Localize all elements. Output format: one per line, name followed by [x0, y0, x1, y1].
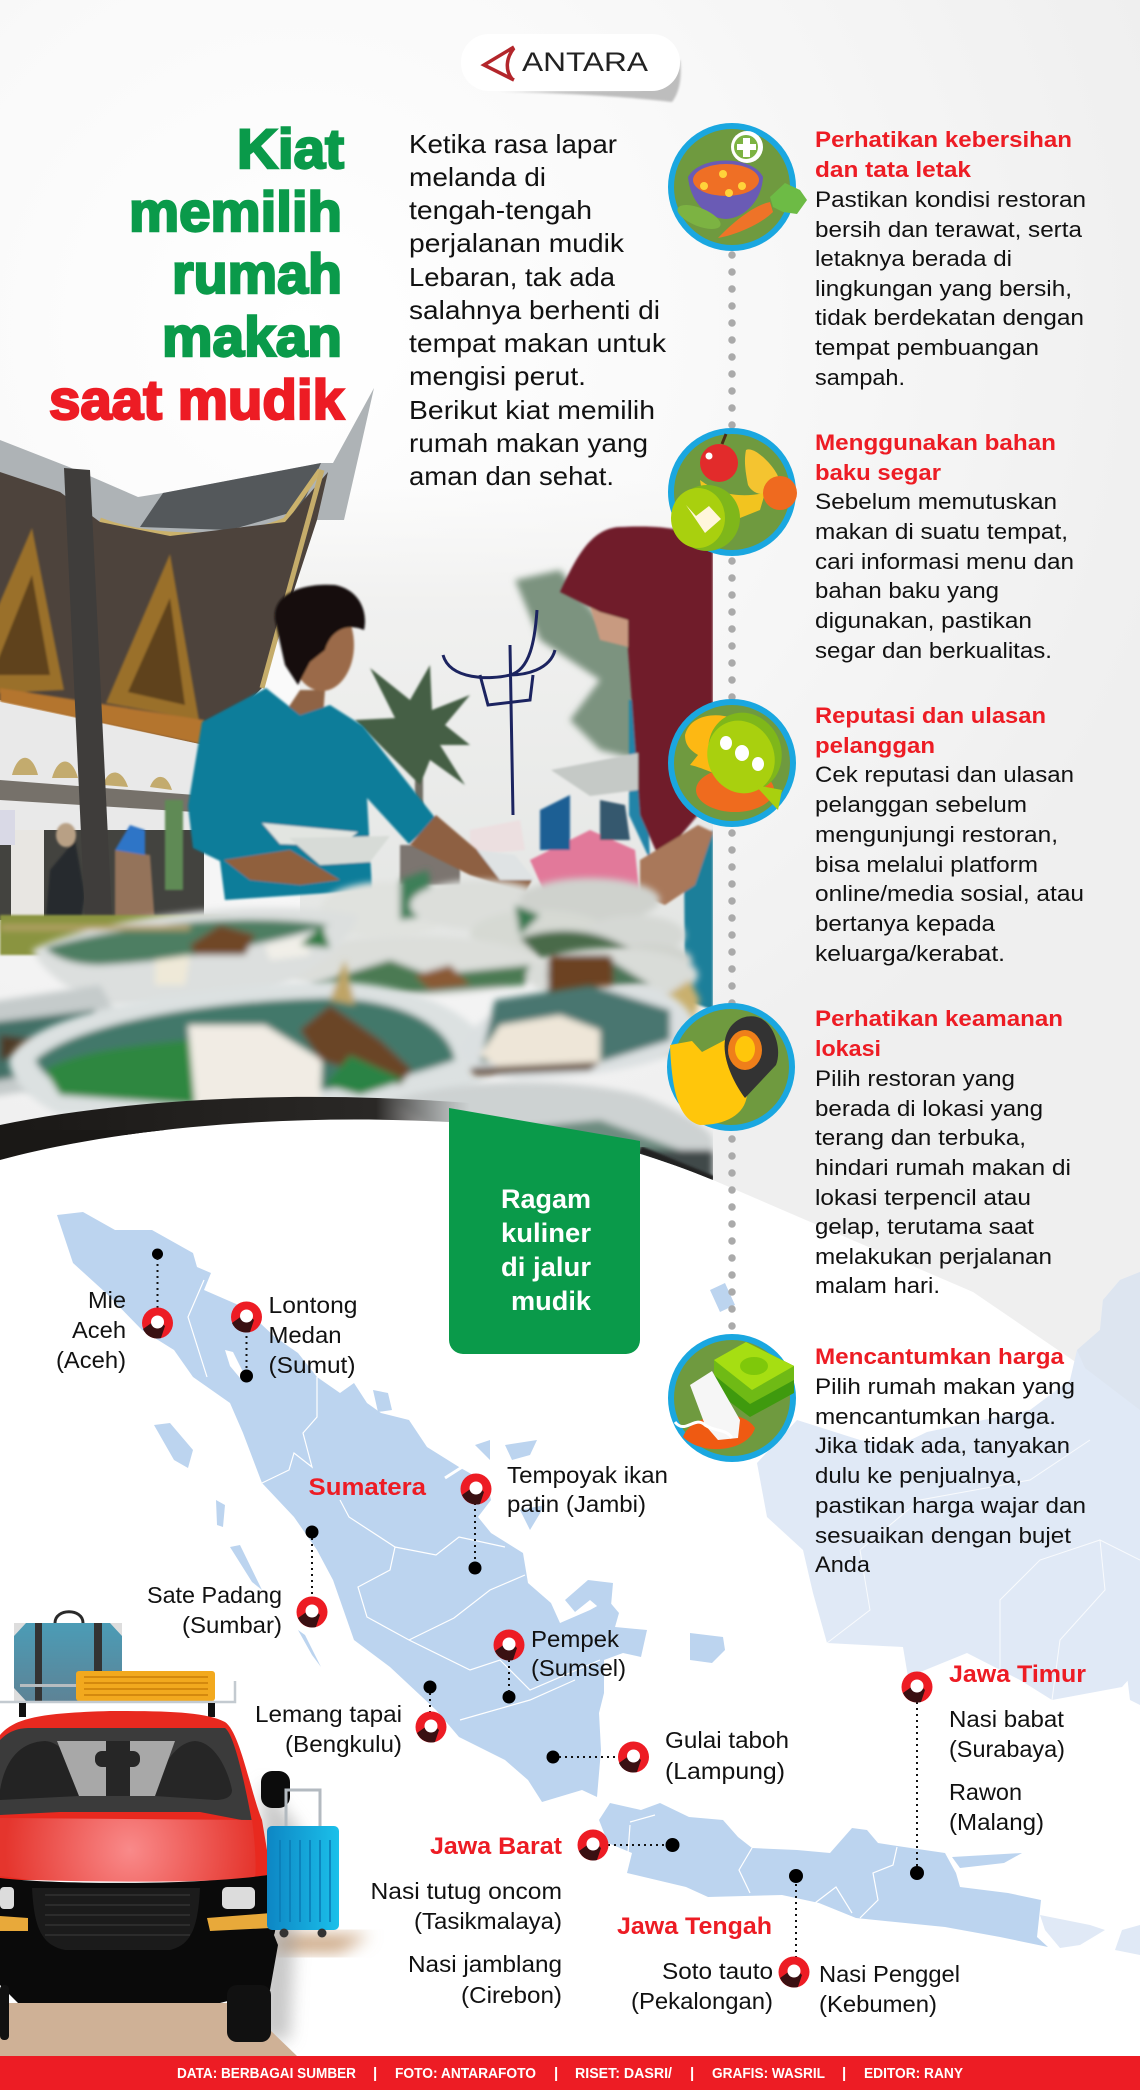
text: Mencantumkan harga: dulu ke penjualnya,	[815, 1463, 1022, 1488]
map: Sulawesi and eastern islands	[1040, 1640, 1140, 1955]
label: Jawa Tengah: (Pekalongan)	[631, 1988, 773, 2014]
marker: Gulai taboh: (Lampung)	[665, 1758, 785, 1784]
label: Jawa Tengah: Jawa Tengah	[617, 1913, 772, 1940]
text: Perhatikan keamanan lokasi: Perhatikan keamanan	[815, 1006, 1063, 1031]
text: Perhatikan kebersihan: Perhatikan kebersihan	[815, 127, 1072, 152]
text: Perhatikan kebersihan: tempat pembuangan	[815, 335, 1039, 360]
photo: woman with red hijab	[551, 526, 713, 1010]
van: red body	[0, 1711, 272, 1880]
text: Perhatikan kebersihan: sampah.	[815, 365, 905, 390]
van: wheels	[0, 1985, 271, 2042]
intro text: melanda di	[409, 162, 546, 192]
timeline dots	[728, 255, 736, 1340]
marker: Sate Padang: (Sumbar)	[182, 1612, 282, 1638]
van: hood	[0, 1818, 256, 1882]
photo: lamp post	[443, 610, 555, 815]
intro text	[409, 129, 667, 491]
text: Reputasi dan ulasan pelanggan: online/media sosial, atau	[815, 881, 1084, 906]
footer credits bar: |	[842, 2065, 846, 2082]
map: Sumatra offshore islands	[154, 1283, 735, 1667]
text: Perhatikan keamanan lokasi: melakukan perjalanan	[815, 1244, 1052, 1269]
label: Jawa Tengah: Nasi Penggel	[819, 1961, 960, 1987]
label: Jawa Barat: (Tasikmalaya)	[414, 1908, 562, 1934]
text: Perhatikan kebersihan: lingkungan yang bersih,	[815, 276, 1072, 301]
van: windshield	[0, 1728, 252, 1822]
photo: middle bowls	[283, 936, 700, 1055]
photo: bottom right bowl	[395, 1082, 713, 1190]
text: Reputasi dan ulasan pelanggan: bertanya kepada	[815, 911, 996, 936]
intro text: mengisi perut.	[409, 361, 586, 391]
icon: money and price tag	[671, 1337, 794, 1459]
text: Reputasi dan ulasan pelanggan: Reputasi dan ulasan	[815, 703, 1046, 728]
logo: ANTARA	[461, 34, 681, 102]
text: Menggunakan bahan baku segar: Menggunakan bahan	[815, 430, 1056, 455]
photo: background bags and tables	[398, 794, 640, 888]
van: ground and shadow	[0, 1780, 370, 2056]
text: Mencantumkan harga	[815, 1344, 1086, 1577]
intro text: Ketika rasa lapar	[409, 129, 617, 159]
footer credits bar: RISET: DASRI/	[575, 2065, 673, 2082]
intro text: Lebaran, tak ada	[409, 262, 616, 292]
photo: bowl left middle	[0, 908, 358, 1005]
footer credits bar: |	[554, 2065, 558, 2082]
text: Perhatikan keamanan lokasi	[815, 1006, 1071, 1298]
photo: dark bottom edge	[0, 1097, 470, 1135]
marker: Tempoyak ikan patin: patin (Jambi)	[507, 1491, 646, 1517]
green tab: Ragam kuliner: mudik	[511, 1286, 592, 1316]
marker: Jawa Timur	[902, 1672, 932, 1880]
text: Perhatikan kebersihan: letaknya berada di	[815, 246, 1012, 271]
title: rumah	[172, 242, 342, 305]
text: Perhatikan keamanan lokasi: lokasi	[815, 1036, 881, 1061]
marker: Tempoyak ikan patin	[460, 1462, 668, 1574]
photo: background people	[45, 800, 183, 925]
photo: food stall in front of Minangkabau building	[0, 388, 713, 1190]
text: Perhatikan kebersihan: bersih dan terawat, serta	[815, 217, 1083, 242]
logo: ANTARA: ANTARA	[522, 47, 648, 77]
marker: Mie Aceh: Mie	[88, 1287, 126, 1313]
label: Jawa Timur: Jawa Timur	[949, 1661, 1086, 1688]
photo: man with teal shirt	[188, 585, 535, 900]
title: memilih	[129, 180, 342, 243]
text: Mencantumkan harga: pastikan harga wajar dan	[815, 1493, 1086, 1518]
label: Jawa Barat: Nasi tutug oncom	[370, 1878, 562, 1904]
map: Belitung	[690, 1633, 725, 1663]
text: Mencantumkan harga: Anda	[815, 1552, 870, 1577]
map: Sumatra	[57, 1212, 647, 1802]
footer credits bar	[0, 2056, 1140, 2090]
photo: roof grey metal	[0, 388, 374, 540]
marker: Lemang tapai: (Bengkulu)	[285, 1731, 402, 1757]
text: Menggunakan bahan baku segar	[815, 430, 1074, 663]
text: Perhatikan keamanan lokasi: hindari rumah makan di	[815, 1155, 1071, 1180]
text: Perhatikan keamanan lokasi: berada di lokasi yang	[815, 1096, 1043, 1121]
van: roof suitcase	[14, 1612, 122, 1701]
marker: Pempek	[494, 1626, 626, 1704]
marker: Mie Aceh: (Aceh)	[56, 1347, 126, 1373]
text: Perhatikan keamanan lokasi: Pilih restoran yang	[815, 1066, 1015, 1091]
text: Perhatikan kebersihan	[815, 127, 1086, 390]
green tab: Ragam kuliner: kuliner	[501, 1218, 591, 1248]
photo: tree	[515, 570, 640, 760]
van: yellow box and rack	[0, 1671, 235, 1717]
marker: Sate Padang: Sate Padang	[147, 1582, 282, 1608]
photo: grass and hedge	[0, 915, 230, 955]
green tab: Ragam kuliner: Ragam	[501, 1184, 591, 1214]
marker: Pempek: Pempek	[531, 1626, 620, 1652]
text: Mencantumkan harga: Mencantumkan harga	[815, 1344, 1065, 1369]
marker: Tempoyak ikan patin: Tempoyak ikan	[507, 1462, 668, 1488]
label: Jawa Timur: (Surabaya)	[949, 1736, 1065, 1762]
footer credits bar: GRAFIS: WASRIL	[712, 2065, 825, 2082]
label: Sumatera: Sumatera	[308, 1474, 427, 1501]
marker: Lontong Medan	[231, 1292, 358, 1382]
footer credits bar: DATA: BERBAGAI SUMBER	[177, 2065, 356, 2082]
footer credits bar: |	[373, 2065, 377, 2082]
van with luggage	[0, 1612, 370, 2056]
label: Jawa Tengah: Soto tauto	[662, 1958, 773, 1984]
photo sky	[300, 570, 713, 949]
marker: Pempek: (Sumsel)	[531, 1655, 626, 1681]
photo: left edge bowl	[0, 984, 113, 1098]
footer credits bar: FOTO: ANTARAFOTO	[395, 2065, 536, 2082]
text: Reputasi dan ulasan pelanggan: pelanggan sebelum	[815, 792, 1027, 817]
photo: gable	[0, 472, 328, 745]
label: Jawa Tengah: (Kebumen)	[819, 1991, 937, 2017]
map of Indonesia	[57, 1212, 1140, 1955]
footer credits bar: EDITOR: RANY	[864, 2065, 963, 2082]
text: Perhatikan kebersihan: Pastikan kondisi restoran	[815, 187, 1086, 212]
green tab: Ragam kuliner	[449, 1108, 640, 1354]
blue luggage	[267, 1790, 339, 1938]
photo: gold triangles	[0, 528, 204, 745]
text: Reputasi dan ulasan pelanggan: pelanggan	[815, 733, 935, 758]
icon: chat bubbles	[671, 701, 795, 824]
label: Jawa Barat	[370, 1833, 562, 2008]
white lower map area	[0, 1120, 1140, 2090]
text: Menggunakan bahan baku segar: Sebelum memutuskan	[815, 489, 1057, 514]
photo: big front bowl	[9, 960, 496, 1115]
intro text: Berikut kiat memilih	[409, 395, 655, 425]
marker: Lemang tapai: Lemang tapai	[255, 1701, 402, 1727]
map: Java and Madura	[599, 1803, 1048, 1947]
title	[49, 117, 345, 431]
text: Perhatikan kebersihan: tidak berdekatan dengan	[815, 305, 1084, 330]
photo: palm tree	[355, 665, 470, 810]
van: front black bumper and grille	[0, 1875, 278, 2003]
marker: Gulai taboh	[546, 1727, 789, 1784]
text: Menggunakan bahan baku segar: bahan baku yang	[815, 578, 999, 603]
text: Reputasi dan ulasan pelanggan	[815, 703, 1084, 966]
photo: pole	[64, 468, 108, 900]
text: Perhatikan keamanan lokasi: lokasi terpencil atau	[815, 1185, 1031, 1210]
label: Jawa Tengah	[617, 1913, 960, 2017]
text: Reputasi dan ulasan pelanggan: keluarga/kerabat.	[815, 941, 1005, 966]
footer credits bar: |	[690, 2065, 694, 2082]
photo: back row of bowls	[320, 870, 692, 976]
marker: Jawa Tengah	[778, 1869, 810, 1988]
marker: Mie Aceh: Aceh	[72, 1317, 126, 1343]
text: Menggunakan bahan baku segar: segar dan berkualitas.	[815, 638, 1052, 663]
label: Jawa Timur: (Malang)	[949, 1809, 1044, 1835]
intro text: salahnya berhenti di	[409, 295, 660, 325]
text: Menggunakan bahan baku segar: baku segar	[815, 460, 941, 485]
marker: Lontong Medan: Medan	[268, 1322, 342, 1348]
label: Jawa Barat: (Cirebon)	[461, 1982, 562, 2008]
label: Jawa Timur: Rawon	[949, 1779, 1022, 1805]
text: Perhatikan kebersihan: dan tata letak	[815, 157, 972, 182]
marker: Mie Aceh	[56, 1248, 173, 1373]
text: Mencantumkan harga: Jika tidak ada, tanyakan	[815, 1433, 1070, 1458]
marker: Lemang tapai	[255, 1680, 446, 1757]
text: Menggunakan bahan baku segar: makan di suatu tempat,	[815, 519, 1068, 544]
map: Kalimantan	[757, 1272, 1140, 1700]
intro text: rumah makan yang	[409, 428, 648, 458]
text: Perhatikan keamanan lokasi: gelap, terutama saat	[815, 1214, 1035, 1239]
marker: Lontong Medan: Lontong	[268, 1292, 358, 1318]
title: saat mudik	[49, 368, 345, 431]
text: Menggunakan bahan baku segar: cari informasi menu dan	[815, 549, 1074, 574]
marker: Gulai taboh: Gulai taboh	[665, 1727, 789, 1753]
green tab: Ragam kuliner: di jalur	[501, 1252, 591, 1282]
intro text: tengah-tengah	[409, 195, 592, 225]
text: Mencantumkan harga: sesuaikan dengan bujet	[815, 1523, 1072, 1548]
marker: Jawa Barat	[578, 1830, 680, 1860]
label: Jawa Barat: Jawa Barat	[430, 1833, 562, 1860]
icon: location pin	[670, 1006, 792, 1128]
marker: Lontong Medan: (Sumut)	[268, 1352, 356, 1378]
photo: white building	[0, 702, 200, 830]
label: Jawa Timur	[949, 1661, 1086, 1835]
title: Kiat	[237, 117, 344, 180]
intro text: aman dan sehat.	[409, 461, 614, 491]
photo: right front bowl	[459, 985, 698, 1080]
van: side mirror	[261, 1771, 290, 1808]
text: Reputasi dan ulasan pelanggan: bisa melalui platform	[815, 852, 1038, 877]
intro text: tempat makan untuk	[409, 328, 667, 358]
text: Perhatikan keamanan lokasi: terang dan terbuka,	[815, 1125, 1026, 1150]
text: Perhatikan keamanan lokasi: malam hari.	[815, 1273, 940, 1298]
text: Reputasi dan ulasan pelanggan: mengunjungi restoran,	[815, 822, 1058, 847]
label: Jawa Barat: Nasi jamblang	[408, 1951, 562, 1977]
intro text: perjalanan mudik	[409, 228, 625, 258]
text: Menggunakan bahan baku segar: digunakan, pastikan	[815, 608, 1032, 633]
van: headlights and indicators	[0, 1887, 271, 1931]
label: Jawa Timur: Nasi babat	[949, 1706, 1065, 1732]
text: Mencantumkan harga: mencantumkan harga.	[815, 1404, 1056, 1429]
marker: Sate Padang	[147, 1526, 328, 1638]
text: Mencantumkan harga: Pilih rumah makan yang	[815, 1374, 1075, 1399]
icon: fresh fruits	[671, 431, 797, 553]
title: makan	[162, 305, 342, 368]
icon: food bowl and vegetables	[671, 126, 807, 248]
text: Reputasi dan ulasan pelanggan: Cek reputasi dan ulasan	[815, 762, 1074, 787]
